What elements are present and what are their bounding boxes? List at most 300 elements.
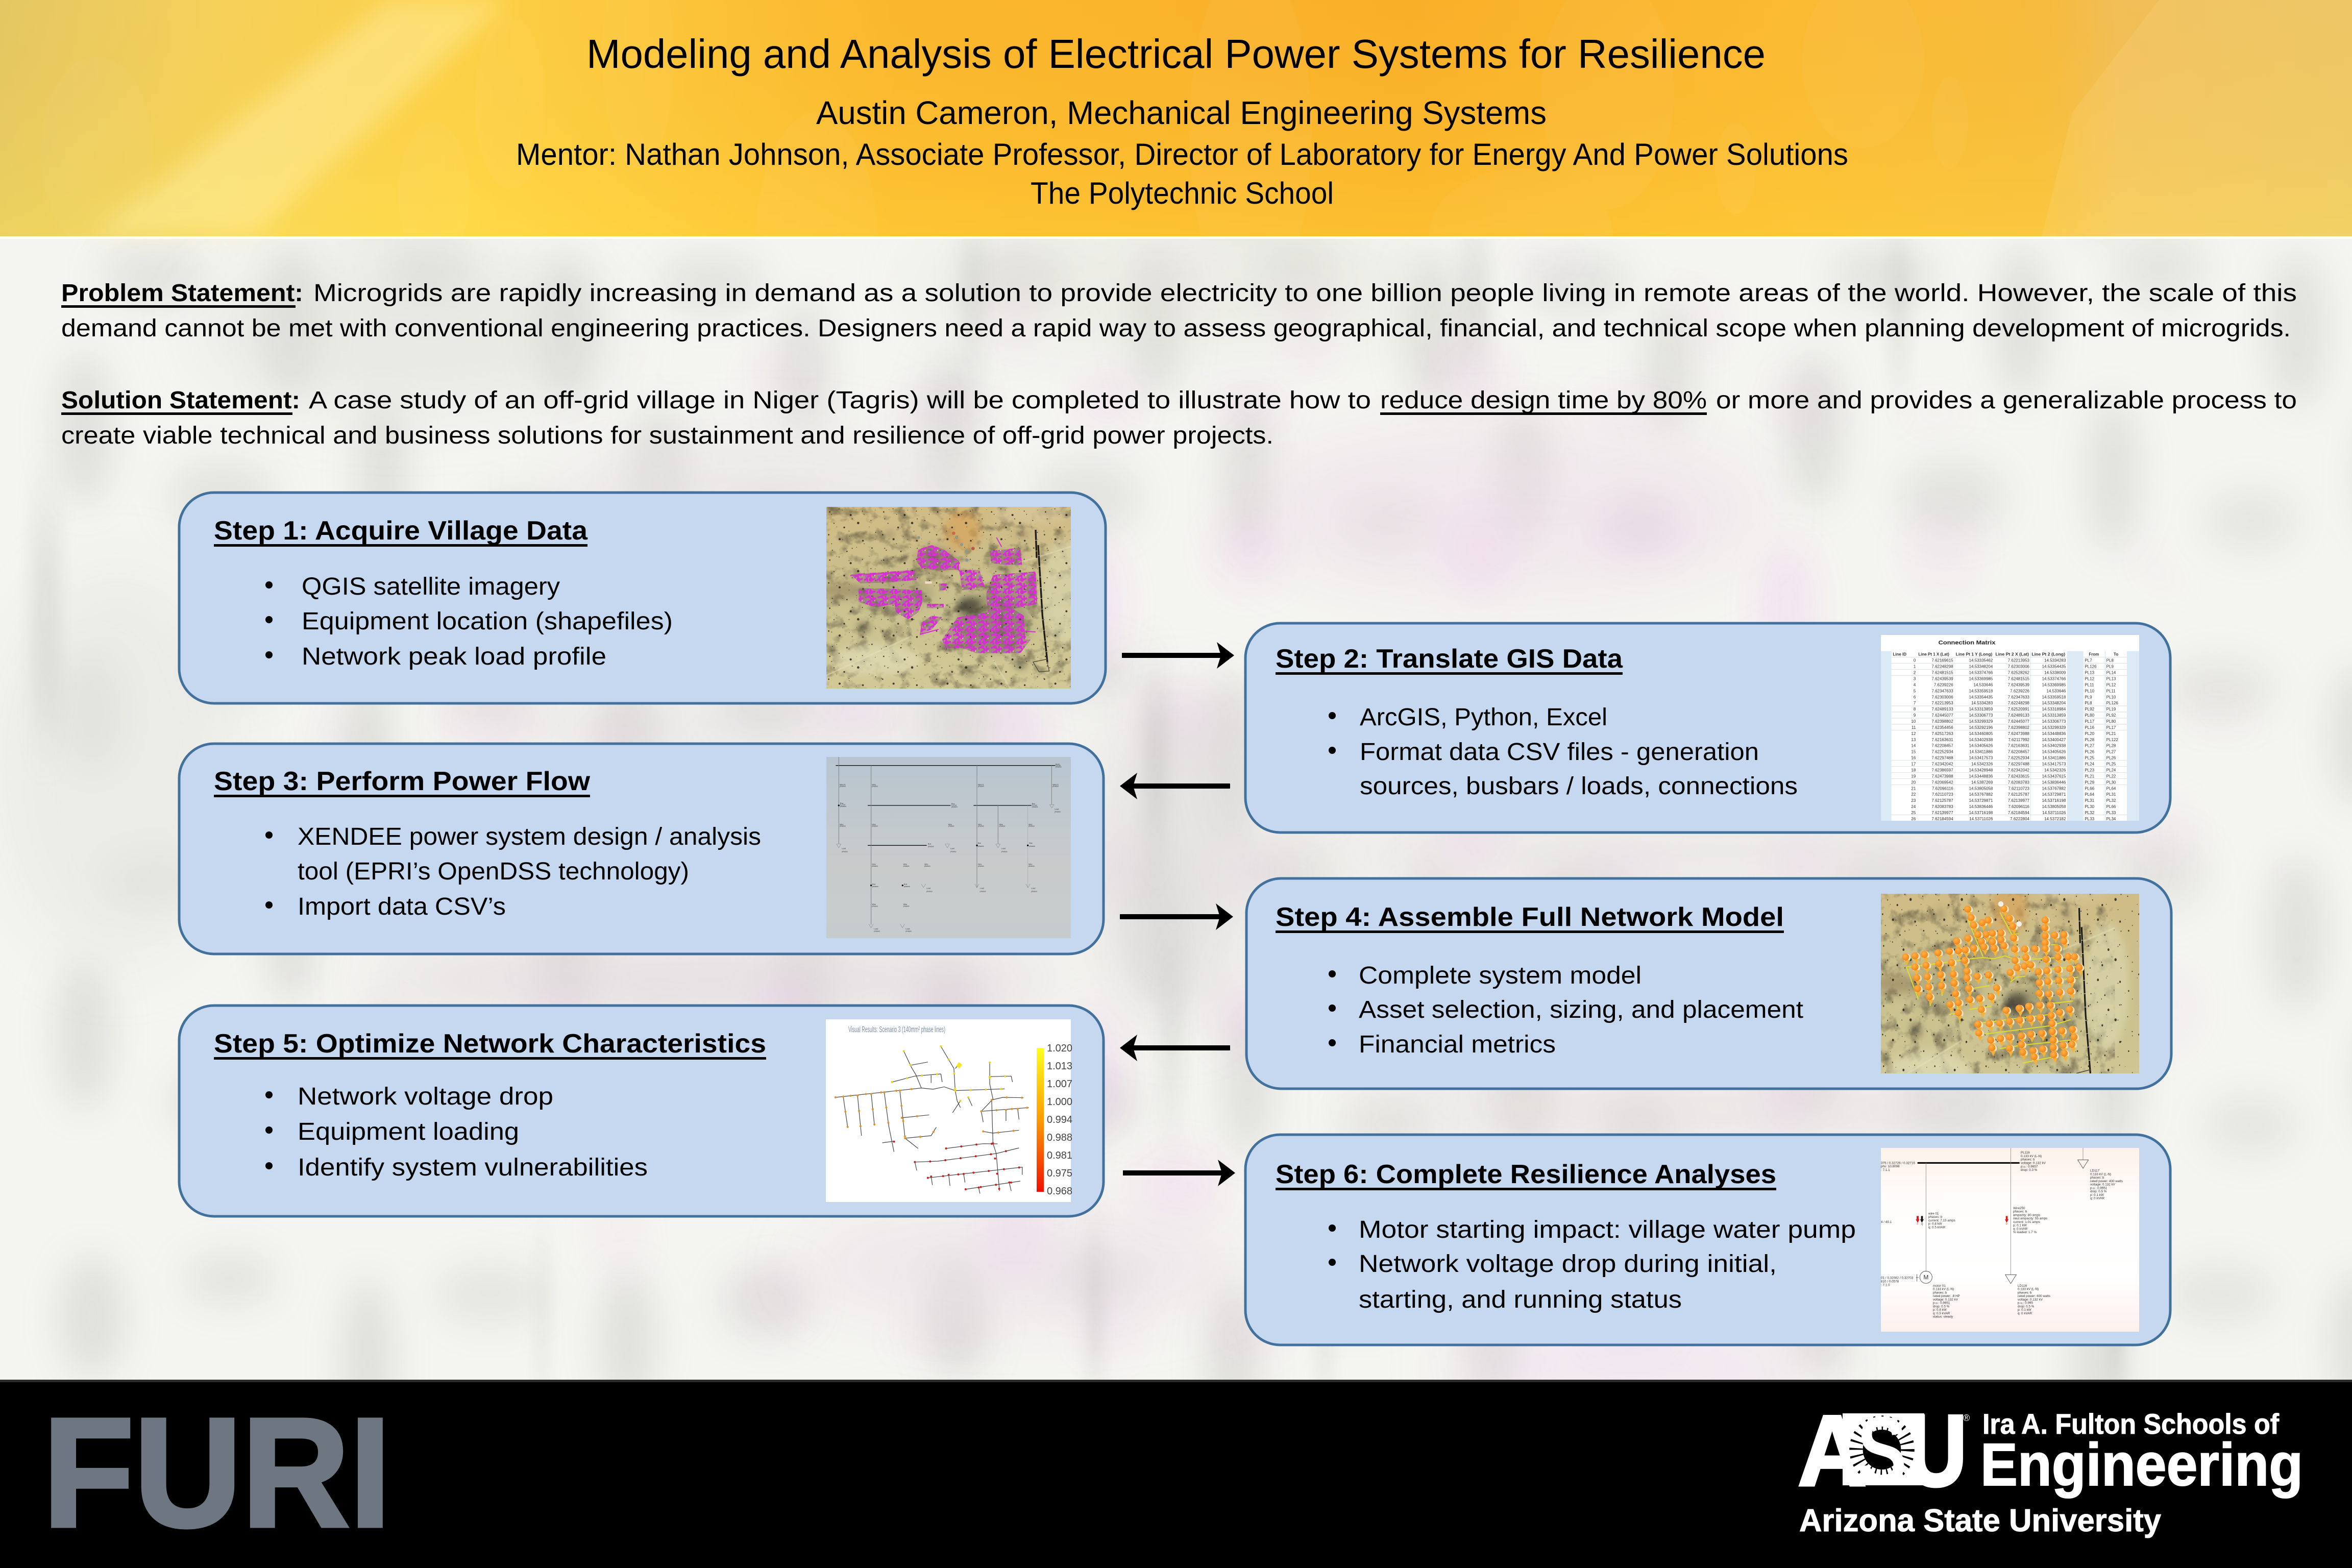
panel: step 4 — [1246, 837, 2171, 1156]
step 2 image: connection matrix table: 7.62110723 — [2008, 786, 2030, 791]
school name: Ira A. Fulton Schools of — [1982, 1408, 2279, 1440]
step 3 image: power flow one-line diagram: phases — [872, 825, 878, 827]
step 2 image: connection matrix table: 14.53369985 — [2042, 682, 2066, 687]
step 2 image: connection matrix table: From — [2089, 652, 2099, 657]
voltage colour bar: 0.975 — [1047, 1168, 1072, 1179]
step 2 image: connection matrix table: PL66 — [2085, 786, 2095, 791]
step 2 image: connection matrix table: 7.62473988 — [2008, 731, 2030, 736]
ASU mark: A — [1798, 1394, 1867, 1507]
step 6 image: motor starting one-line diagram: p.u.: 0.9957 — [2021, 1165, 2038, 1168]
step 2 image: connection matrix table: 7.62117992 — [2008, 738, 2030, 742]
panel: step 2 — [1245, 623, 2170, 832]
step 2 image: connection matrix table: 20 — [1911, 780, 1916, 785]
step 3 bullets: tool (EPRI’s OpenDSS technology) — [298, 858, 689, 885]
step 2 image: connection matrix table: PL31 — [2085, 798, 2095, 803]
step 3 image: power flow one-line diagram: Bus — [872, 884, 875, 886]
header divider — [0, 236, 2352, 239]
voltage colour bar: 0.988 — [1047, 1132, 1072, 1143]
step 6 image: motor starting one-line diagram: phases: b — [2090, 1176, 2104, 1180]
step 1 bullets — [265, 573, 673, 670]
step 6 image: motor starting one-line diagram: phases: b — [2013, 1210, 2027, 1214]
step 3 image: power flow one-line diagram: phases — [951, 806, 958, 808]
step 6 image: motor starting one-line diagram: p.u.: 0.9951 — [1933, 1302, 1950, 1305]
step 2 image: connection matrix table: 7.62096116 — [2008, 804, 2030, 809]
step 3 image: power flow one-line diagram: Load — [1001, 848, 1006, 850]
step 2 image: connection matrix table: 7.62125787 — [1931, 798, 1953, 803]
step 2 image: connection matrix table: 7.62163631 — [1931, 738, 1953, 742]
step 2 image: connection matrix table: PL32 — [2085, 811, 2095, 815]
step 3 image: power flow one-line diagram: Wire — [1028, 864, 1033, 866]
panel: step 3 — [179, 744, 1104, 954]
step 2 image: connection matrix table: 9 — [1914, 713, 1916, 718]
step 2 image: connection matrix table: 7.62517263 — [1931, 731, 1953, 736]
step 2 image: connection matrix table: 14.5334283 — [1971, 701, 1993, 705]
step 2 image: connection matrix table: PL23 — [2085, 768, 2095, 772]
step 2 image: connection matrix table: Line Pt 1 X (Lat) — [1918, 652, 1949, 657]
step 6 image: motor starting one-line diagram: drop: 0.5 % — [2090, 1190, 2107, 1193]
step 2 image: connection matrix table: 2 — [1914, 671, 1916, 675]
step 3 image: power flow one-line diagram: Wire — [840, 823, 844, 825]
step 2 image: connection matrix table: 7.62433615 — [2008, 774, 2030, 778]
step 3 image: power flow one-line diagram: 0.4 kV — [1056, 765, 1061, 767]
step 2 image: connection matrix table: PL66 — [2106, 804, 2116, 809]
step 3 image: power flow one-line diagram: phases — [1055, 811, 1061, 813]
step 2 image: connection matrix table: 7.62096116 — [1932, 786, 1953, 791]
voltage colour bar — [1037, 1043, 1072, 1197]
problem statement: Microgrids are rapidly increasing in demand as a solution to provide electricity to one billion people living in remote areas of the world. However, the scale of this — [313, 280, 2297, 307]
step 2 bullets — [1329, 704, 1798, 800]
step 2 image: connection matrix table: Line Pt 2 (Long) — [2031, 652, 2065, 657]
step 2 image: connection matrix table: 14.53767882 — [2042, 786, 2066, 791]
step 5 image: network voltage map: Visual Results: Scenario 3 (140mm² phase lines) — [848, 1025, 945, 1034]
step 2 image: connection matrix table: 7.62520991 — [2008, 707, 2030, 712]
step 6 image: motor starting one-line diagram: p: 0.8 kW — [1928, 1222, 1942, 1226]
step 3 image: power flow one-line diagram: Wire — [948, 823, 952, 825]
step 3 image: power flow one-line diagram: phases — [999, 825, 1006, 827]
step 3 heading: Step 3: Perform Power Flow — [214, 767, 591, 796]
step 3 image: power flow one-line diagram: phases — [926, 891, 933, 893]
step 2 image: connection matrix table: 14.53313859 — [1969, 707, 1993, 712]
step 2 image: connection matrix table: 14.53299329 — [1969, 719, 1993, 724]
step 3 image: power flow one-line diagram: Bus — [928, 843, 931, 845]
step 2 image: connection matrix table: PL10 — [2106, 695, 2116, 699]
step 2 image: connection matrix table: 24 — [1911, 804, 1916, 809]
step 2 image: connection matrix table: PL11 — [2085, 682, 2094, 687]
step 2 image: connection matrix table: PL21 — [2085, 774, 2095, 778]
step 6 image: motor starting one-line diagram: voltage: 0.132 kV — [2018, 1298, 2043, 1302]
arrow: step 1 to step 2 — [1122, 642, 1234, 669]
step 2 image: connection matrix table: 7.6239226 — [1934, 682, 1953, 687]
step 6 image: motor starting one-line diagram: voltage: 0.132 kV — [1933, 1298, 1958, 1302]
step 6 bullets: Motor starting impact: village water pump — [1359, 1216, 1856, 1243]
step 1 bullets: Equipment location (shapefiles) — [302, 608, 673, 635]
step 6 image: motor starting one-line diagram: phases: b — [2018, 1291, 2032, 1294]
step 2 image: connection matrix table: Line Pt 1 Y (Long) — [1956, 652, 1993, 657]
step 2 image: connection matrix table: PL126 — [2106, 701, 2118, 705]
step 6 image: motor starting one-line diagram: 4 / 40.1 — [1881, 1220, 1892, 1224]
step 3 image: power flow one-line diagram: phases — [978, 865, 984, 867]
step 2 image: connection matrix table: 14.5342326 — [1971, 762, 1993, 767]
step 2 image: connection matrix table: PL26 — [2085, 750, 2095, 754]
step 2 image: connection matrix table: 7.62489133 — [1931, 707, 1953, 712]
step 2 image: connection matrix table: 14.53437615 — [2042, 774, 2066, 778]
voltage colour bar: 0.968 — [1047, 1186, 1072, 1197]
step 3 image: power flow one-line diagram: phases — [1052, 785, 1059, 787]
step 1 bullets: Network peak load profile — [302, 643, 606, 670]
step 2 heading: Step 2: Translate GIS Data — [1276, 644, 1623, 674]
step 2 image: connection matrix table: 7.62439539 — [1931, 676, 1953, 681]
problem statement: Problem Statement: — [61, 280, 303, 307]
step 6 image: motor starting one-line diagram: phases: b — [2021, 1158, 2035, 1162]
step 3 image: power flow one-line diagram: Wire — [999, 823, 1003, 825]
step 2 image: connection matrix table: PL13 — [2085, 671, 2095, 675]
step 2 image: connection matrix table: PL12 — [2106, 682, 2116, 687]
step 3 image: power flow one-line diagram: Wire — [872, 864, 876, 866]
step 6 image: motor starting one-line diagram: P — [1917, 1223, 1918, 1226]
step 2 image: connection matrix table: PL31 — [2106, 792, 2116, 797]
step 6 image: motor starting one-line diagram: drop: 0.5 % — [1933, 1305, 1950, 1308]
step 2 image: connection matrix table: 14.53448836 — [2042, 731, 2066, 736]
step 2 image: connection matrix table: PL28 — [2085, 738, 2095, 742]
step 2 image: connection matrix table: PL9 — [2085, 695, 2092, 699]
ASU mark: U — [1906, 1394, 1967, 1507]
step 2 image: connection matrix table: PL24 — [2106, 768, 2116, 772]
step 2 image: connection matrix table: 21 — [1911, 786, 1916, 791]
step 4 bullets: Complete system model — [1359, 962, 1641, 989]
step 2 image: connection matrix table: 7.62213953 — [1931, 701, 1953, 705]
step 3 image: power flow one-line diagram: phases — [1031, 891, 1037, 893]
step 2 image: connection matrix table: 14.53354435 — [1969, 695, 1993, 699]
step 3 image: power flow one-line diagram: Wire71 — [978, 783, 984, 786]
step 3 image: power flow one-line diagram: phases — [903, 865, 910, 867]
step 5 bullets — [265, 1083, 648, 1181]
step 2 image: connection matrix table: 7.62184594 — [1931, 817, 1953, 821]
step 5 bullets: Equipment loading — [298, 1118, 519, 1145]
step 2 image: connection matrix table: 14.53348204 — [1969, 665, 1993, 669]
step 6 image: motor starting one-line diagram: rated power: 400 watts — [2090, 1180, 2123, 1183]
step 2 image: connection matrix table: PL17 — [2085, 719, 2095, 724]
step 2 image: connection matrix table: PL12 — [2085, 676, 2095, 681]
step 6 image: motor starting one-line diagram: p: 0.1 kW — [2013, 1224, 2027, 1228]
step 6 image: motor starting one-line diagram: phases: b — [1933, 1291, 1947, 1294]
step 2 image: connection matrix table: 14.53405626 — [1969, 744, 1993, 748]
step 3 image: power flow one-line diagram: phases — [903, 905, 910, 907]
step 2 image: connection matrix table: PL9 — [2106, 665, 2114, 669]
step 2 image: connection matrix table: 14.53417573 — [2042, 762, 2066, 767]
step 2 image: connection matrix table: 7.62303006 — [1931, 695, 1953, 699]
arrow: step 3 to step 4 — [1120, 903, 1233, 930]
step 2 image: connection matrix table: 7.62445077 — [2008, 719, 2030, 724]
step 2 image: connection matrix table: PL8 — [2106, 658, 2114, 663]
step 2 image: connection matrix table: 5 — [1914, 689, 1916, 693]
voltage colour bar: 1.020 — [1047, 1043, 1072, 1054]
step 2 image: connection matrix table: PL17 — [2106, 725, 2116, 730]
step 1 bullets: QGIS satellite imagery — [302, 573, 560, 600]
step 3 image: power flow one-line diagram: phases — [1028, 825, 1035, 827]
step 6 image: motor starting one-line diagram: q: 0 kVAR — [2013, 1227, 2027, 1231]
step 6 image: motor starting one-line diagram: Wire250 — [2013, 1207, 2025, 1210]
step 2 image: connection matrix table: PL22 — [2106, 774, 2116, 778]
step 3 bullets: Import data CSV’s — [298, 893, 506, 920]
step 2 bullets: Format data CSV files - generation — [1360, 739, 1759, 766]
step 3 image: power flow one-line diagram: Wire — [872, 903, 876, 905]
step 3 image: power flow one-line diagram: phases — [872, 886, 878, 888]
step 2 image: connection matrix table: 14.53400427 — [2042, 738, 2066, 742]
step 2 image: connection matrix table: 7.62139977 — [1931, 811, 1953, 815]
step 2 image: connection matrix table: PL122 — [2106, 738, 2118, 742]
step 2 image: connection matrix table: 7.62347633 — [2008, 695, 2030, 699]
step 2 image: connection matrix table: 7.62347633 — [1931, 689, 1953, 693]
step 3 image: power flow one-line diagram: phases — [840, 805, 846, 807]
step 2 image: connection matrix table: 14.53729871 — [1969, 798, 1993, 803]
step 6 image: motor starting one-line diagram: p.u.: 0.9951 — [2090, 1186, 2108, 1190]
problem statement: demand cannot be met with conventional engineering practices. Designers need a rapid way to assess geographical, financial, and technical scope when planning development of microgrids. — [61, 315, 2291, 342]
step 3 image: power flow one-line diagram: 0.4 kV — [951, 804, 957, 806]
step 3 image: power flow one-line diagram: phases — [980, 891, 986, 893]
step 3 image: power flow one-line diagram: phases — [950, 851, 957, 853]
step 2 image: connection matrix table: 13 — [1911, 738, 1916, 742]
ASU mark — [1798, 1394, 1970, 1507]
step 6 image: motor starting one-line diagram: 0.133 kV (L-N) — [2090, 1172, 2111, 1176]
step 3 image: power flow one-line diagram: phases — [1032, 806, 1038, 808]
step 6 image: motor starting one-line diagram — [1881, 1148, 2139, 1332]
step 2 image: connection matrix table: 7.62528262 — [2008, 671, 2030, 675]
step 2 image: connection matrix table: PL10 — [2085, 689, 2095, 693]
step 2 image: connection matrix table: 14.53460805 — [1969, 731, 1993, 736]
voltage colour bar: 1.007 — [1047, 1079, 1072, 1090]
step 6 image: motor starting one-line diagram: wire 01 — [1928, 1212, 1939, 1215]
step 2 image: connection matrix table: 14.53411886 — [2042, 756, 2066, 761]
step 2 image: connection matrix table: 7 — [1914, 701, 1916, 705]
step 2 image: connection matrix table: 7.62489133 — [2008, 713, 2030, 718]
step 3 image: power flow one-line diagram: 0.4 kV — [1032, 804, 1038, 806]
title: Modeling and Analysis of Electrical Power Systems for Resilience — [586, 31, 1766, 77]
step 2 image: connection matrix table: 7.62248298 — [1931, 665, 1953, 669]
step 6 image: motor starting one-line diagram: Q — [1921, 1223, 1923, 1226]
step 2 image: connection matrix table: 14.53729871 — [2042, 792, 2066, 797]
step 6 image: motor starting one-line diagram: P — [2006, 1223, 2007, 1226]
step 3 image: power flow one-line diagram: phases — [872, 905, 878, 907]
step 2 image: connection matrix table: PL29 — [2085, 780, 2095, 785]
ASU mark: S — [1857, 1397, 1907, 1505]
step 6 image: motor starting one-line diagram: q: 0 kVAR — [2018, 1312, 2032, 1315]
solution statement — [61, 387, 2297, 449]
step 6 image: motor starting one-line diagram: 0.133 kV (L-N) — [2021, 1155, 2042, 1158]
step 2 image: connection matrix table: PL64 — [2106, 786, 2116, 791]
step 3 image: power flow one-line diagram: Load — [905, 928, 910, 930]
step 2 image: connection matrix table: 7.62297488 — [2008, 762, 2030, 767]
step 3 image: power flow one-line diagram: Load — [980, 888, 984, 890]
step 2 image: connection matrix table: 7.62208457 — [1931, 744, 1953, 748]
step 6 image: motor starting one-line diagram: current: 7.13 amps — [1928, 1219, 1955, 1222]
footer bar — [0, 1380, 2352, 1568]
step 2 image: connection matrix table: PL7 — [2085, 658, 2092, 663]
step 3 bullets: XENDEE power system design / analysis — [298, 823, 761, 850]
step 2 image: connection matrix table: 7.62439539 — [2008, 682, 2030, 687]
step 6 image: motor starting one-line diagram: 0.133 kV (L-N) — [2018, 1288, 2039, 1291]
step 2 image: connection matrix table: 14.53306773 — [1969, 713, 1993, 718]
step 6 image: motor starting one-line diagram: p: 0.1 kW — [2018, 1308, 2031, 1312]
step 2 image: connection matrix table: 7.62398802 — [2008, 725, 2030, 730]
solution statement: or more and provides a generalizable process to — [1716, 387, 2297, 414]
step 2 image: connection matrix table: PL27 — [2106, 750, 2116, 754]
step 2 image: connection matrix table: 7.62069542 — [1931, 780, 1953, 785]
step 2 image: connection matrix table: 14.53836446 — [1969, 804, 1993, 809]
step 2 image: connection matrix table: To — [2114, 652, 2118, 657]
step 3 image: power flow one-line diagram: 0.4 kV — [840, 804, 846, 806]
step 2 image: connection matrix table: 14.53402938 — [1969, 738, 1993, 742]
step 2 image: connection matrix table: 14.53711026 — [2042, 811, 2066, 815]
step 4 bullets: Asset selection, sizing, and placement — [1359, 996, 1803, 1023]
step 2 image: connection matrix table: 14.53716198 — [2042, 798, 2066, 803]
step 3 image: power flow one-line diagram: phases — [840, 825, 846, 827]
step 6 image: motor starting one-line diagram: PL116 — [2021, 1151, 2030, 1155]
step 2 image: connection matrix table: 7.62213953 — [2008, 658, 2030, 663]
step 2 image: connection matrix table: 14.53359518 — [1969, 689, 1993, 693]
step 6 image: motor starting one-line diagram: 01 / 0.32082 / 0.32703 — [1881, 1277, 1914, 1280]
step 6 image: motor starting one-line diagram: q: 0.5 kVAR — [1933, 1312, 1950, 1315]
step 2 image: connection matrix table: PL28 — [2106, 744, 2116, 748]
step 6 image: motor starting one-line diagram: phs: 10.8098 — [1881, 1165, 1900, 1168]
step 3 image: power flow one-line diagram: Bus1 — [1056, 764, 1060, 766]
step 2 image: connection matrix table: 7.6239226 — [2010, 689, 2030, 693]
voltage colour bar: 1.000 — [1047, 1096, 1072, 1108]
step 3 image: power flow one-line diagram: phases — [905, 930, 912, 933]
step 3 image: power flow one-line diagram: phases — [840, 785, 846, 787]
step 4 bullets: Financial metrics — [1359, 1031, 1556, 1058]
arrow: step 5 to step 6 — [1123, 1160, 1235, 1186]
step 2 image: connection matrix table: 7.62083783 — [2008, 780, 2030, 785]
step 2 image: connection matrix table: 14.53411886 — [1969, 750, 1993, 754]
step 2 image: connection matrix table: PL13 — [2106, 676, 2116, 681]
step 3 image: power flow one-line diagram: phases — [874, 930, 880, 933]
step 3 image: power flow one-line diagram: phases — [904, 886, 910, 888]
step 4 bullets — [1329, 962, 1803, 1058]
step 2 image: connection matrix table: 14.53805058 — [1969, 786, 1993, 791]
step 2 image: connection matrix table: PL33 — [2106, 811, 2116, 815]
step 2 image: connection matrix table: PL126 — [2085, 665, 2097, 669]
step 3 image: power flow one-line diagram: phases — [872, 785, 878, 787]
step 3 image: power flow one-line diagram: Load — [874, 928, 878, 930]
step 3 image: power flow one-line diagram: phases — [842, 851, 848, 853]
step 2 image: connection matrix table: 14.53318984 — [2042, 707, 2066, 712]
step 2 image: connection matrix table: 14.53292196 — [1969, 725, 1993, 730]
step 2 image: connection matrix table: PL92 — [2106, 713, 2116, 718]
step 2 image: connection matrix table: 14.5334283 — [2044, 658, 2066, 663]
step 6 image: motor starting one-line diagram: rated power: 400 watts — [2018, 1294, 2050, 1298]
step 2 image: connection matrix table: PL19 — [2106, 707, 2116, 712]
step 2 image: connection matrix table: 14.53716198 — [1969, 811, 1993, 815]
step 2 image: connection matrix table: 14.53767882 — [1969, 792, 1993, 797]
step 3 image: power flow one-line diagram: Wire — [872, 823, 876, 825]
panel: step 5 — [179, 1006, 1104, 1216]
step 3 image: power flow one-line diagram: phases — [1029, 845, 1035, 847]
step 2 image: connection matrix table: 7.62184594 — [2008, 811, 2030, 815]
step 2 image: connection matrix table: 14.53428948 — [1969, 768, 1993, 772]
step 2 image: connection matrix table: PL32 — [2106, 798, 2116, 803]
step 2 image: connection matrix table: PL25 — [2085, 756, 2095, 761]
school: The Polytechnic School — [1031, 176, 1334, 210]
step 2 image: connection matrix table: 7.62354456 — [1931, 725, 1953, 730]
step 2 bullets: sources, busbars / loads, connections — [1360, 773, 1798, 800]
step 6 image: motor starting one-line diagram: current: 1.01 amps — [2013, 1220, 2040, 1224]
step 2 bullets: ArcGIS, Python, Excel — [1360, 704, 1607, 731]
step 2 image: connection matrix table: 14.53359518 — [2042, 695, 2066, 699]
ASU mark: ® — [1963, 1413, 1970, 1423]
arrow: step 2 to step 3 — [1120, 773, 1230, 799]
step 2 image: connection matrix table: 14.53374766 — [2042, 676, 2066, 681]
solution statement: A case study of an off-grid village in Niger (Tagris) will be completed to illustrate how to — [309, 387, 1371, 414]
step 2 image: connection matrix table: 14.53348204 — [2042, 701, 2066, 705]
step 6 image: motor starting one-line diagram: status: steady — [1933, 1315, 1953, 1319]
step 3 image: power flow one-line diagram: Bus — [840, 802, 843, 804]
step 6 image: motor starting one-line diagram: : 7.1.0 — [1881, 1283, 1890, 1287]
step 3 image: power flow one-line diagram: Wire72 — [1052, 783, 1059, 786]
step 3 image: power flow one-line diagram: Wire — [924, 864, 928, 866]
step 6 image: motor starting one-line diagram: ampacity: 80 amps — [2013, 1213, 2040, 1217]
step 2 image: connection matrix table: Connection Matrix — [1939, 640, 1995, 646]
step 2 image: connection matrix table: 14.5342326 — [2044, 768, 2066, 772]
step 2 image: connection matrix table: 14.53711026 — [1969, 817, 1993, 821]
step 6 image: motor starting one-line diagram: p.u.: 0.995 — [2018, 1302, 2033, 1305]
step 3 image: power flow one-line diagram: phases — [872, 865, 878, 867]
step 3 image: power flow one-line diagram: Bus — [978, 842, 981, 844]
step 2 image: connection matrix table: 7.62252934 — [2008, 756, 2030, 761]
step 2 image: connection matrix table: PL80 — [2106, 719, 2116, 724]
step 3 image: power flow one-line diagram: phases — [924, 865, 930, 867]
step 2 image: connection matrix table: 1 — [1914, 665, 1916, 669]
step 2 image: connection matrix table: 7.62445077 — [1931, 713, 1953, 718]
step 6 image: motor starting one-line diagram: p: 0.8 kW — [1933, 1308, 1947, 1312]
step 3 image: power flow one-line diagram: Wire70 — [840, 783, 846, 786]
step 2 image: connection matrix table: 8 — [1914, 707, 1916, 712]
step 5 image: network voltage map — [826, 1019, 1072, 1202]
FURI logo: FURI — [43, 1386, 391, 1559]
step 2 image: connection matrix table: 7.62248298 — [2008, 701, 2030, 705]
step 3 image: power flow one-line diagram: phases — [1028, 865, 1035, 867]
step 2 image: connection matrix table: 3 — [1914, 676, 1916, 681]
step 5 bullets: Network voltage drop — [298, 1083, 553, 1110]
step 2 image: connection matrix table: 7.62139977 — [2008, 798, 2030, 803]
step 3 image: power flow one-line diagram: Wire — [978, 864, 982, 866]
step 6 image: motor starting one-line diagram: rated power: .8 HP — [1933, 1294, 1960, 1298]
step 2 image: connection matrix table: 14.53448836 — [1969, 774, 1993, 778]
step 2 image: connection matrix table: 7.62083783 — [1931, 804, 1953, 809]
step 2 image: connection matrix table: 7.62481515 — [1931, 671, 1953, 675]
step 3 image: power flow one-line diagram: Bus — [1032, 803, 1035, 805]
step 6 bullets — [1329, 1216, 1856, 1313]
step 6 image: motor starting one-line diagram: voltage: 0.132 kV — [2090, 1183, 2116, 1187]
step 3 image: power flow one-line diagram: Load — [926, 888, 930, 890]
step 3 image: power flow one-line diagram — [826, 757, 1071, 938]
step 6 image: motor starting one-line diagram: 0.133 kV (L-N) — [1933, 1288, 1954, 1291]
step 3 bullets — [265, 823, 761, 920]
step 3 image: power flow one-line diagram: Wire — [903, 903, 907, 905]
step 3 image: power flow one-line diagram: Load — [1031, 888, 1035, 890]
step 2 image: connection matrix table: 14.53417573 — [1969, 756, 1993, 761]
step 2 image: connection matrix table: PL80 — [2085, 713, 2095, 718]
step 6 image: motor starting one-line diagram: 810 / 0.0578 — [1881, 1280, 1899, 1284]
step 2 image: connection matrix table: PL27 — [2085, 744, 2095, 748]
step 2 image: connection matrix table: 14.53335462 — [1969, 658, 1993, 663]
solution statement: create viable technical and business solutions for sustainment and resilience of off-grid power projects. — [61, 422, 1273, 449]
panel: step 6 — [1245, 1135, 2170, 1345]
step 2 image: connection matrix table: 14.53299329 — [2042, 725, 2066, 730]
step 2 image: connection matrix table: 14.53354435 — [2042, 665, 2066, 669]
step 6 image: motor starting one-line diagram: p: 0.1 kW — [2090, 1193, 2104, 1197]
step 6 image: motor starting one-line diagram: neut ampacity: 55 amps — [2013, 1217, 2047, 1220]
step 6 image: motor starting one-line diagram: M — [1923, 1273, 1928, 1281]
